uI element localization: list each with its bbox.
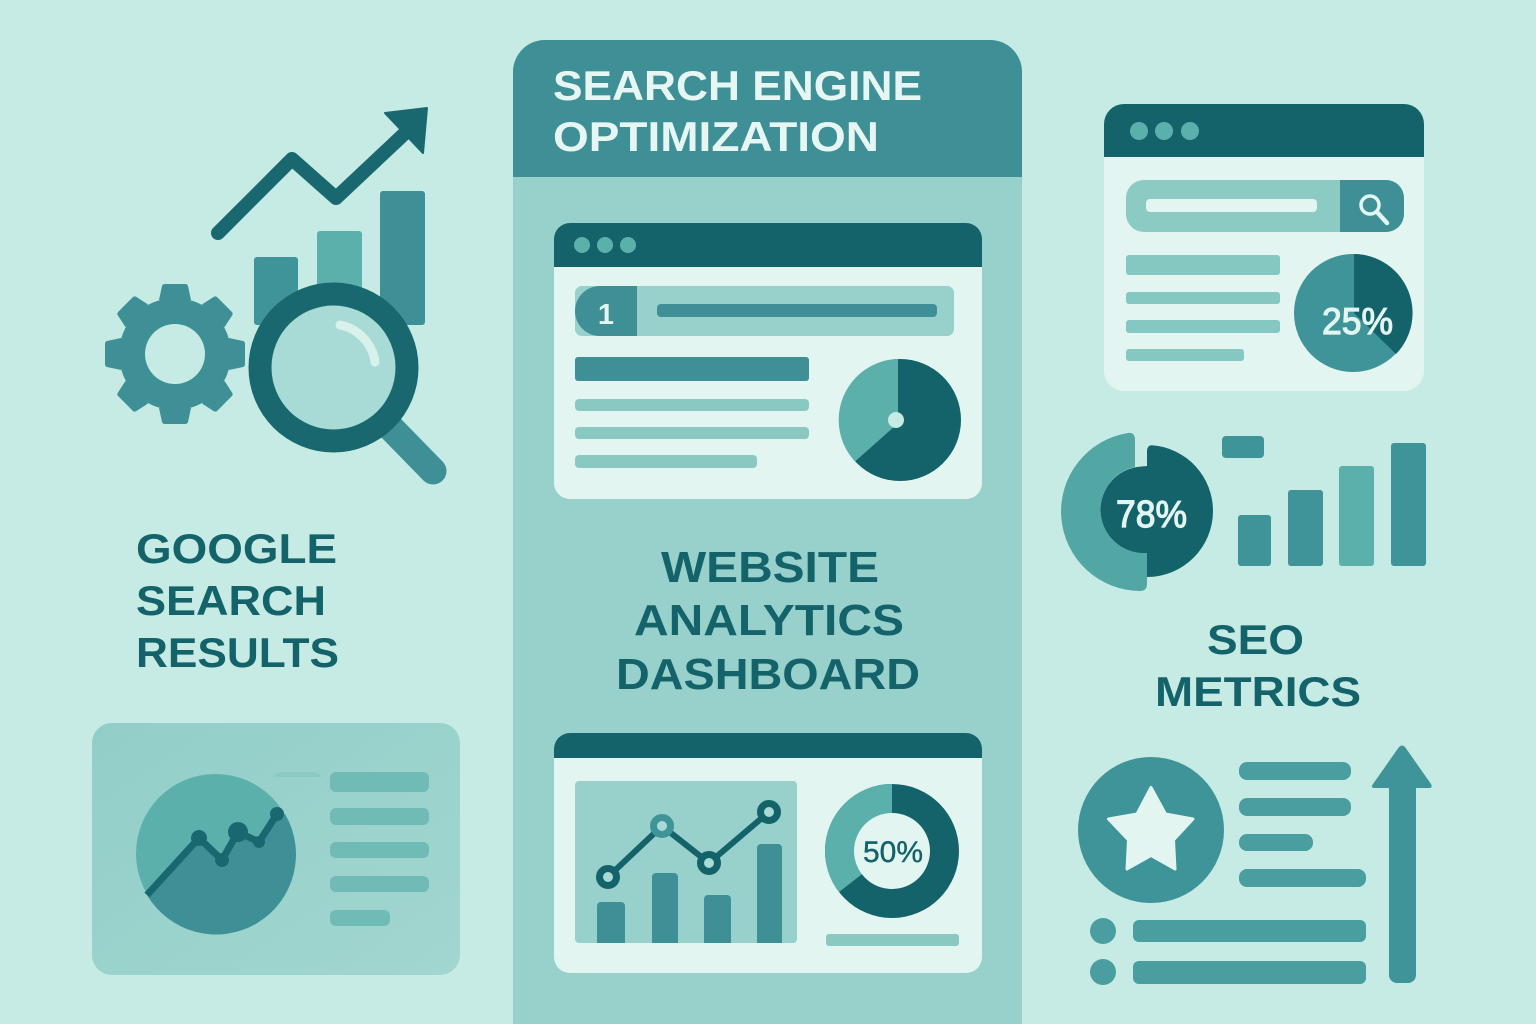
text lines bbox=[1126, 255, 1280, 361]
caption bar bbox=[826, 934, 959, 946]
title: SEARCH ENGINE bbox=[553, 62, 922, 109]
title bbox=[553, 62, 922, 160]
line and bar chart bbox=[575, 781, 797, 943]
center header band bbox=[513, 40, 1022, 177]
panel: center column bbox=[513, 40, 1022, 1024]
search result row: 1 bbox=[598, 299, 614, 331]
bar chart: metrics bbox=[1222, 436, 1426, 566]
search result row bbox=[575, 286, 954, 336]
donut chart 78% bbox=[1061, 433, 1213, 591]
donut chart: 50% bbox=[863, 836, 923, 869]
heading: seo metrics: METRICS bbox=[1155, 668, 1361, 715]
circle chart bbox=[136, 774, 296, 934]
panel: lower left chart card bbox=[92, 723, 460, 975]
heading: google search results: RESULTS bbox=[136, 629, 339, 676]
search bar bbox=[1126, 180, 1404, 232]
pie chart 25% bbox=[1294, 254, 1413, 372]
list rows bbox=[1090, 918, 1366, 985]
icon: gear bbox=[105, 284, 245, 424]
heading: seo metrics bbox=[1155, 616, 1361, 715]
heading: website analytics dashboard: DASHBOARD bbox=[616, 650, 920, 699]
pie chart 25%: 25% bbox=[1322, 301, 1393, 342]
bar chart bbox=[254, 191, 425, 325]
arrow up bbox=[1372, 746, 1432, 983]
heading: seo metrics: SEO bbox=[1207, 616, 1304, 663]
arrow bbox=[218, 108, 427, 233]
pie chart bbox=[839, 359, 961, 481]
panel: browser window ranking bbox=[554, 223, 982, 499]
panel: analytics dashboard window bbox=[554, 733, 982, 973]
title: OPTIMIZATION bbox=[553, 113, 879, 160]
icon: magnifier bbox=[248, 282, 433, 471]
heading: google search results: GOOGLE bbox=[136, 525, 337, 572]
text lines bbox=[575, 357, 809, 468]
heading: google search results: SEARCH bbox=[136, 577, 326, 624]
icon: growth chart with gear and magnifier bbox=[105, 108, 433, 471]
text lines bbox=[330, 772, 429, 926]
icon: star badge bbox=[1078, 757, 1224, 903]
heading: website analytics dashboard bbox=[616, 543, 920, 699]
heading: google search results bbox=[136, 525, 339, 676]
ranking lines bbox=[1239, 762, 1366, 887]
heading: website analytics dashboard: ANALYTICS bbox=[634, 596, 904, 645]
donut chart bbox=[825, 784, 959, 918]
donut chart 78%: 78% bbox=[1116, 494, 1187, 536]
heading: website analytics dashboard: WEBSITE bbox=[661, 543, 879, 592]
panel: browser window search bbox=[1104, 104, 1424, 391]
